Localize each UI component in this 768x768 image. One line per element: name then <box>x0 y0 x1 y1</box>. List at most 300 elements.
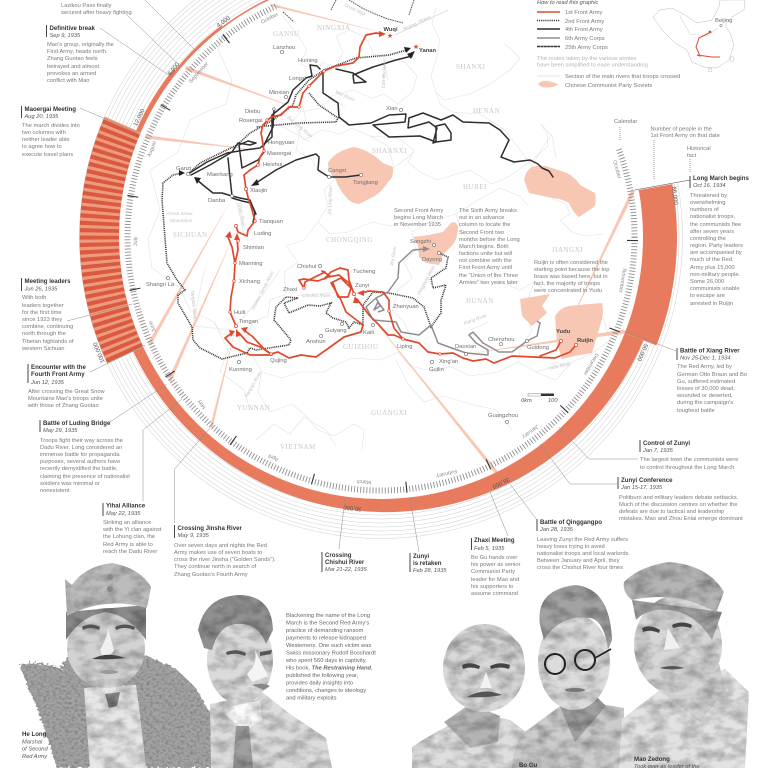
event: Battle of Xiang River: Gu, suffered estimated <box>677 379 735 385</box>
ring: troop number labels: 12,000 <box>133 108 147 127</box>
map: towns: Rouergai <box>239 118 263 124</box>
text block: Blackening the name: Swiss missionary Rudolf Bosshardt <box>286 650 376 656</box>
event: Yihai Alliance: Yihai Alliance <box>106 502 146 510</box>
annotation: historical fact <box>687 146 711 172</box>
label: Great Wall and Beijing arrow: Beijing 790km <box>402 15 432 33</box>
note: Ruijin: Ruijin is often considered the <box>534 260 608 266</box>
annotation: number of people: 1st Front Army on that date <box>650 133 720 139</box>
event: Definitive break: conflict with Mao <box>47 78 90 84</box>
map: provincial borders and rivers <box>148 8 610 450</box>
event: Definitive break <box>46 25 170 84</box>
map: province names: VIETNAM <box>280 443 316 451</box>
map: towns: Diebu <box>245 109 260 115</box>
event: Zhaxi Meeting: Feb 5, 1935 <box>474 546 505 552</box>
caption: Mao Zedong <box>634 756 700 768</box>
event: Battle of Luding Bridge: Dadu River. Long considered an <box>40 445 122 451</box>
event: Yihai Alliance: Red Army is able to <box>103 542 153 548</box>
event: Zunyi is retaken: Feb 28, 1935 <box>413 568 447 574</box>
event: Meeting leaders: combine, continuing <box>22 324 73 330</box>
event: Battle of Xiang River: losses of 30,000 dead, <box>677 386 735 392</box>
map: towns: Liping <box>397 344 412 350</box>
event: Long March begins: overwhelming <box>690 200 725 206</box>
legend: how to read this graphic: 2nd Front Army <box>565 19 604 25</box>
map: province names: YUNNAN <box>237 404 270 412</box>
event: Maoergai Meeting: two columns with <box>22 130 66 136</box>
map: towns: Huining <box>298 58 318 64</box>
ring: month labels: January <box>521 423 539 440</box>
map: towns: Minxian <box>269 90 289 96</box>
event: Zhaxi Meeting: Zhaxi Meeting <box>474 537 515 544</box>
event: Definitive break: Definitive break <box>50 25 95 32</box>
map: towns: Longxi <box>289 76 306 82</box>
ring: troop number labels: 86,000 <box>670 186 678 206</box>
ring: month labels: December <box>582 352 599 376</box>
note: Ruijin: brass was based here, but in <box>534 274 608 280</box>
note: second front army: in November 1935 <box>394 222 441 228</box>
event: Maoergai Meeting: execute travel plans <box>22 152 73 158</box>
map: province names: HENAN <box>473 107 500 115</box>
event: Crossing Chishui River: Chishui River <box>325 559 365 566</box>
event: Crossing Jinsha River: May 9, 1935 <box>178 533 210 539</box>
map: towns: Guiyang <box>325 328 347 334</box>
ring: month labels: June <box>148 320 158 333</box>
note: sixth army: Second Front two <box>459 230 504 236</box>
ring: troop number labels: 100,000 <box>93 341 107 364</box>
event: Encounter with the Fourth Front Army: After crossing the Great Snow <box>28 389 106 395</box>
map: towns: Heishui <box>263 162 282 168</box>
event: Battle of Luding Bridge: nonexistent <box>40 488 70 494</box>
event: Zunyi is retaken: is retaken <box>413 560 442 567</box>
annotation: calendar: Calendar <box>614 119 637 125</box>
event: Encounter with the Fourth Front Army: with those of Zhang Guotao <box>27 403 99 409</box>
event: Zhaxi Meeting <box>471 492 521 597</box>
legend: how to read this graphic: 25th Army Corps <box>565 45 608 51</box>
map: river and feature labels: Wu River <box>389 245 398 266</box>
map: province names: SHANXI <box>456 63 486 71</box>
note: second front army <box>394 208 443 228</box>
map scale: 0km <box>521 398 532 404</box>
event: Zhaxi Meeting: Bo Gu hands over <box>471 555 517 561</box>
event: Long March begins: Long March begins <box>693 175 749 182</box>
event: Zhaxi Meeting: his supporters to <box>471 584 514 590</box>
locator map: China: Beijing <box>715 18 732 24</box>
note: sixth army: factions unite but will <box>459 251 512 257</box>
text block: Blackening the name <box>285 613 376 702</box>
ring: troop number labels <box>93 15 678 511</box>
event: Long March begins: arrested in Ruijin <box>690 301 733 307</box>
locator map: China <box>653 0 745 72</box>
map: towns: Tongjiang <box>353 180 378 186</box>
event: Battle of Xiang River: wounded or deserted, <box>676 393 733 399</box>
note: sixth army: not combine with the <box>459 258 512 264</box>
ring: troop number labels: 38,000 <box>491 476 510 489</box>
event: Battle of Luding Bridge: recently demystified the battle, <box>40 466 118 472</box>
portrait: He Long <box>20 563 222 768</box>
event: Battle of Qinggangpo <box>510 484 630 571</box>
event: Battle of Xiang River: German Otto Braun and Bo <box>677 372 747 378</box>
ring: month labels: August <box>147 140 158 158</box>
note: Ruijin: starting point because the top <box>534 267 609 273</box>
event: Battle of Qinggangpo: Between January and April, they <box>537 558 620 564</box>
note: sixth army: March begins. Both <box>459 244 509 250</box>
event: Long March begins: Army plus 15,000 <box>690 265 735 271</box>
map: river and feature labels: Luo Wu River <box>381 58 388 88</box>
ring: month labels <box>133 12 627 485</box>
text block: Blackening the name: conditions, changes to ideology <box>286 688 366 694</box>
event: Zunyi Conference: Politburo and military leaders debate setbacks. <box>619 495 739 501</box>
event: Battle of Xiang River: Battle of Xiang River <box>680 348 740 354</box>
event: Control of Zunyi: to control throughout the Long March <box>640 465 734 471</box>
note: sixth army: The Sixth Army breaks <box>459 208 517 214</box>
map: province names: GUANGXI <box>371 409 407 417</box>
ring: troop number labels: 4,000 <box>216 15 232 29</box>
map: towns: Mianning <box>239 261 263 267</box>
note: Ruijin: were concentrated in Yudu <box>533 288 602 294</box>
map: towns: ★ <box>387 32 393 40</box>
event: Meeting leaders: since 1923 they <box>22 317 62 323</box>
map: river and feature labels: Wei River <box>334 89 356 103</box>
event: Battle of Qinggangpo: nationalist troops and local warlords. <box>537 551 630 557</box>
ring: month labels: May <box>196 398 207 410</box>
note: second front army: begins Long March <box>394 215 443 221</box>
legend: how to read this graphic: 1st Front Army <box>565 10 603 16</box>
map: towns: Tucheng <box>353 269 375 275</box>
legend: how to read this graphic: 6th Army Corps <box>565 36 605 42</box>
Long March routes <box>162 31 576 363</box>
ring: month labels: September <box>188 61 210 85</box>
event: Maoergai Meeting: Aug 20, 1935 <box>24 114 59 120</box>
event: Long March begins: much of the Red <box>690 257 732 263</box>
event: Maoergai Meeting: The march divides into <box>22 123 80 129</box>
event: Encounter with the Fourth Front Army: Mountains Mao's troops unite <box>28 396 103 402</box>
legend: how to read this graphic: 4th Front Army <box>565 27 603 33</box>
map: towns: Lanzhou <box>273 45 295 51</box>
label: Great Wall and Beijing arrow: Great Wall <box>343 2 367 18</box>
ring: month labels: November <box>617 268 627 293</box>
map: towns: Chenzhou <box>488 337 514 343</box>
map: towns: Cangxi <box>328 168 346 174</box>
map: towns: Anshun <box>306 339 326 345</box>
event: Long March begins: region. Party leaders <box>690 243 743 249</box>
map: river and feature labels <box>167 58 572 399</box>
ring: number of people band <box>80 0 677 512</box>
map: towns: Sangzhi <box>410 239 431 245</box>
event: Zunyi is retaken <box>410 498 447 574</box>
event: Control of Zunyi <box>559 427 738 471</box>
event: Meeting leaders: Tibetan highlands of <box>22 339 74 345</box>
route: 2nd Front Army <box>162 47 448 359</box>
event: Long March begins: are accompanied by <box>690 250 742 256</box>
event: Yihai Alliance: Striking an alliance <box>103 520 151 526</box>
map: towns: Maerkang <box>207 172 233 178</box>
event: Encounter with the Fourth Front Army: Encounter with the <box>31 364 86 371</box>
text block: Blackening the name: Westerners. One such victim was <box>286 643 371 649</box>
event: Battle of Qinggangpo: Leaving Zunyi the Red Army suffers <box>537 537 628 543</box>
event: Zunyi Conference: Jan 15-17, 1935 <box>620 485 663 491</box>
event: Battle of Luding Bridge: claiming the presence of nationalist <box>40 474 130 480</box>
text block: Blackening the name: published the following year, <box>286 673 359 679</box>
ring: month labels: March <box>356 478 371 485</box>
legend: how to read this graphic: Section of the main rivers that troops crossed <box>565 74 680 80</box>
event: Yihai Alliance: May 22, 1935 <box>106 511 141 517</box>
event: Long March begins: to escape are <box>690 293 725 299</box>
map: towns: Xing'an <box>439 359 458 365</box>
event: Control of Zunyi: Jan 7, 1935 <box>642 448 674 454</box>
event: Battle of Luding Bridge: Troops fight their way across the <box>40 438 123 444</box>
ring: calendar ticks <box>127 0 638 493</box>
event: Control of Zunyi: Control of Zunyi <box>643 440 690 447</box>
text block: Blackening the name: who spent 560 days in captivity. <box>285 658 367 664</box>
route: 1st Front Army <box>225 31 576 363</box>
Great Wall zigzags <box>283 0 414 23</box>
note: Ruijin: fact, the majority of troops <box>534 281 600 287</box>
event: Zhaxi Meeting: assume command <box>471 591 518 597</box>
annotation: number of people <box>650 126 720 179</box>
note: sixth army: months before the Long <box>459 237 520 243</box>
label: Great Wall and Beijing arrow <box>343 2 448 35</box>
event: Battle of Qinggangpo: cross the Chishui River four times <box>537 565 623 571</box>
map: river and feature labels: Great Snow <box>167 211 193 217</box>
event: Zhaxi Meeting: Communist Party <box>471 569 515 575</box>
event: Zunyi Conference <box>540 444 743 522</box>
event: Encounter with the Fourth Front Army: Jun 12, 1935 <box>30 380 65 386</box>
map: province names: JIANGXI <box>552 246 583 254</box>
event: Battle of Luding Bridge: Battle of Luding Bridge <box>43 420 111 427</box>
event: Zhaxi Meeting: his power as senior <box>471 562 521 568</box>
event: Definitive break: First Army, heads north. <box>47 49 108 55</box>
note: second front army: Second Front Army <box>394 208 443 214</box>
event: Zunyi Conference: Zunyi Conference <box>621 477 673 484</box>
note: sixth army <box>459 208 520 286</box>
map: towns: Daoxian <box>455 344 476 350</box>
text block: Blackening the name: provides daily insights into <box>286 680 353 686</box>
event: Long March begins: non-military people. <box>690 272 741 278</box>
note: Ruijin <box>533 260 609 294</box>
ring: troop number labels: 30,000 <box>342 503 362 511</box>
map: river and feature labels: Dadu River <box>236 202 246 227</box>
event: Yihai Alliance <box>102 399 182 555</box>
event: Crossing Jinsha River: Over seven days and nights the Red <box>174 543 267 549</box>
map: towns: Yudu <box>556 329 571 335</box>
event: Long March begins: Threatened by <box>690 193 727 199</box>
annotation: calendar <box>614 119 637 141</box>
map: towns: Xiaojin <box>250 188 267 194</box>
text block: Blackening the name: Blackening the name of the Long <box>286 613 370 619</box>
route: 25th Army Corps <box>323 51 553 177</box>
annotation: historical fact: Historical <box>687 146 711 152</box>
map: province names: HUBEI <box>463 183 487 191</box>
event: Long March begins: nationalist troops, <box>690 214 735 220</box>
map: province names <box>173 24 583 451</box>
legend: how to read this graphic <box>537 0 680 89</box>
event: Long March begins: the communists flee <box>690 222 741 228</box>
event: Battle of Xiang River: Nov 25-Dec 1, 1934 <box>680 356 731 362</box>
event: Meeting leaders: Jun 26, 1935 <box>24 286 58 292</box>
note: sixth army: column to locate the <box>459 222 510 228</box>
event: Meeting leaders: leaders together <box>22 303 64 309</box>
event: Lazikou Pass <box>61 0 195 64</box>
event: Long March begins: after seven years <box>690 229 734 235</box>
event: Encounter with the Fourth Front Army: Fourth Front Army <box>31 371 85 378</box>
map: province names: GANSU <box>273 30 300 38</box>
event: Crossing Jinsha River: Crossing Jinsha River <box>178 525 242 532</box>
legend: how to read this graphic: How to read this graphic <box>537 0 598 6</box>
map: river and feature labels: Pingjiang River <box>416 264 437 296</box>
map: towns: Guidong <box>527 345 549 351</box>
map: towns: Luding <box>254 231 271 237</box>
map: river and feature labels: Mountains <box>170 218 193 224</box>
map: towns: ★ <box>413 43 419 51</box>
event: Control of Zunyi: The largest town the communists were <box>640 457 738 463</box>
event: Crossing Jinsha River: cross the river Jinsha (“Golden Sands”). <box>174 557 276 563</box>
text block: Blackening the name: payments to release kidnapped <box>286 636 366 642</box>
event: Long March begins: Some 26,000 <box>690 279 724 285</box>
note: sixth army: out in an advance <box>459 215 504 221</box>
map: province names: CHONGQING <box>326 236 373 244</box>
map: river and feature labels: Jia Ling River <box>327 185 334 216</box>
text block: Blackening the name: His book, The Restraining Hand, <box>286 666 373 672</box>
portrait: Bo Gu <box>512 585 624 768</box>
event: Yihai Alliance: reach the Dadu River <box>103 549 157 555</box>
event: Zunyi is retaken: Zunyi <box>413 553 430 560</box>
map: towns: Shimian <box>243 245 264 251</box>
text block: Blackening the name: practice of demanding ransom <box>286 628 364 634</box>
event: Long March begins <box>635 175 749 307</box>
event: Definitive break: Zhang Guotao feels <box>47 56 98 62</box>
event: Battle of Luding Bridge: May 29, 1935 <box>43 428 78 434</box>
map: towns: Kaili <box>363 330 374 336</box>
event: Lazikou Pass: Lazikou Pass finally <box>61 3 112 9</box>
event: Crossing Jinsha River: Zhang Guotao's Fourth Army <box>174 572 248 578</box>
event: Crossing Jinsha River: Army makes use of seven boats to <box>174 550 262 556</box>
event: Battle of Luding Bridge: immense battle for propaganda <box>40 452 120 458</box>
annotation: number of people: Number of people in the <box>650 126 712 132</box>
event: Long March begins: Oct 16, 1934 <box>693 183 726 189</box>
map: river and feature labels: Xiang River <box>462 313 488 327</box>
map: towns: Danba <box>208 198 226 204</box>
map: river and feature labels: Bai Long River <box>286 115 314 140</box>
event: Long March begins: numbers of <box>690 207 719 213</box>
event: Yihai Alliance: the Lohung clan, the <box>103 534 155 540</box>
event: Encounter with the Fourth Front Army <box>27 345 145 409</box>
map: towns: Kunming <box>229 367 252 373</box>
caption: He Long: Red Army <box>22 754 48 760</box>
map: towns: Zunyi <box>355 283 369 289</box>
event: Maoergai Meeting: Maoergai Meeting <box>24 106 76 113</box>
caption: Mao Zedong: Mao Zedong <box>634 756 670 763</box>
map: towns: Zhenyuan <box>393 304 419 310</box>
event: Maoergai Meeting: neither leader able <box>22 137 70 143</box>
map: province names: HUNAN <box>466 297 494 305</box>
legend: how to read this graphic: The routes taken by the various armies <box>537 56 637 62</box>
map: towns: Tianquan <box>259 219 283 225</box>
ring: month labels: July <box>133 236 139 246</box>
event: Zunyi Conference: Much of the discussion centres on whether the <box>619 502 738 508</box>
map scale: 100 <box>548 398 558 404</box>
caption: He Long: of Second <box>22 746 48 752</box>
map: province names: SHAANXI <box>372 147 407 155</box>
event: Battle of Qinggangpo: heavy loses trying to avoid <box>537 544 605 550</box>
event: Battle of Xiang River: toughest battle <box>677 408 715 414</box>
event: Battle of Luding Bridge: soldiers was minimal or <box>40 481 100 487</box>
event: Zunyi Conference: mistakes. Mao and Zhou Enlai emerge dominant <box>619 516 743 522</box>
ring: month labels: April <box>268 452 280 462</box>
caption: He Long: Marshal <box>22 740 43 746</box>
note: sixth army: First Front Army until <box>459 265 512 271</box>
event: Maoergai Meeting: to agree how to <box>22 144 62 150</box>
event: Meeting leaders <box>21 278 132 352</box>
event: Lazikou Pass: secured after heavy fighting <box>61 10 132 16</box>
legend: how to read this graphic: Chinese Communist Party Soviets <box>565 83 652 89</box>
portrait: Mao Zedong <box>619 562 749 768</box>
map: communist party soviets <box>328 147 603 359</box>
portrait: uniformed officer <box>412 624 530 768</box>
ring: month labels: February <box>435 467 457 479</box>
map: river and feature labels: Yangtze River <box>189 290 198 320</box>
map: towns: Huili <box>234 310 245 316</box>
caption: He Long <box>22 731 48 760</box>
map: towns <box>146 27 594 424</box>
event: Zunyi Conference: defeats are due to tactical and leadership <box>619 509 724 515</box>
map: towns: Guilin <box>429 367 444 373</box>
caption: He Long: He Long <box>22 731 47 738</box>
event: Meeting leaders: for the first time <box>22 310 62 316</box>
map: towns: Guangzhou <box>488 413 518 419</box>
map: towns: Hongyuan <box>268 140 294 146</box>
event: Battle of Qinggangpo: Battle of Qinggangpo <box>540 519 602 526</box>
route: 6th Army Corps <box>366 246 540 355</box>
map: river and feature labels: Yudu River <box>547 361 572 372</box>
map leaders: salmon wedges from ring to route <box>145 4 636 474</box>
map: towns: Shangri La <box>146 282 175 288</box>
map: river and feature labels: Golden Sands River <box>250 270 276 311</box>
map: towns: Maoergai <box>267 151 291 157</box>
annotation: historical fact: fact <box>687 153 697 159</box>
event: Meeting leaders: With both <box>22 295 46 301</box>
map: river and feature labels: Chishui River <box>302 293 331 299</box>
event: Definitive break: Mao's group, originally the <box>47 42 114 48</box>
note: sixth army: Armies” two years later <box>459 280 518 286</box>
event: Battle of Xiang River <box>624 331 747 414</box>
map: towns: Chishui <box>297 264 316 270</box>
map: towns: Zhaxi <box>283 287 297 293</box>
event: Long March begins: controlling the <box>690 236 726 242</box>
map: towns: Dayong <box>422 257 442 263</box>
map: towns: Yanan <box>419 48 437 54</box>
portrait: Rudolf Bosshardt <box>198 595 332 768</box>
event: Battle of Qinggangpo: Jan 28, 1935 <box>539 527 574 533</box>
map: towns: Ganzi <box>176 166 191 172</box>
event: Definitive break: betrayed and almost <box>47 64 100 70</box>
ring: troop number labels: 50,000 <box>635 342 648 362</box>
map scale <box>521 394 558 404</box>
event: Crossing Chishui River <box>322 498 368 573</box>
map: river and feature labels: Nanpan River <box>244 370 264 399</box>
event: Battle of Xiang River: during the campaign's <box>677 400 733 406</box>
event: Meeting leaders: north through the <box>22 331 66 337</box>
event: Battle of Luding Bridge <box>40 384 167 494</box>
event: Yihai Alliance: with the Yi clan against <box>102 527 162 533</box>
event: Maoergai Meeting <box>22 106 138 158</box>
event: Zhaxi Meeting: leader for Mao and <box>471 577 519 583</box>
event: Crossing Jinsha River: They continue north in search of <box>174 564 257 570</box>
ring: month labels: October <box>260 12 280 26</box>
event: Battle of Xiang River: The Red Army, led by <box>677 364 732 370</box>
map: towns: Xian <box>386 106 398 112</box>
ring: month labels: October <box>611 160 622 180</box>
map: province names: GUIZHOU <box>343 343 378 351</box>
event: Long March begins: communists unable <box>690 286 740 292</box>
